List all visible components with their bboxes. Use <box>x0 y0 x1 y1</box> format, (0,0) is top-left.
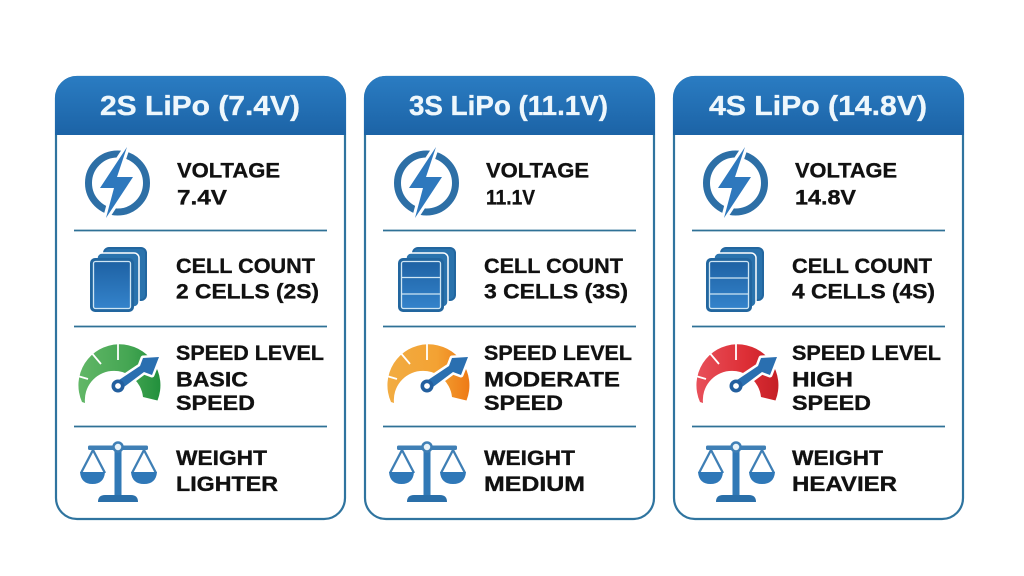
weight text: WEIGHT <box>792 447 883 470</box>
icon: speed gauge <box>385 341 469 403</box>
icon: balance scale <box>698 442 775 502</box>
voltage text: 11.1V <box>486 186 535 210</box>
speed level text: SPEED LEVEL <box>484 342 632 365</box>
weight text: HEAVIER <box>792 473 897 496</box>
weight text <box>176 447 278 496</box>
icon: cell stack <box>706 248 763 312</box>
icon: cell stack <box>398 248 455 312</box>
weight text <box>484 447 585 496</box>
speed level text: HIGH <box>792 368 853 392</box>
heading: 4S LiPo (14.8V) <box>709 90 927 121</box>
voltage text: 14.8V <box>795 186 856 210</box>
cell count text <box>792 255 935 304</box>
card outline <box>674 77 963 519</box>
icon: cell stack <box>90 248 146 312</box>
voltage text <box>177 160 280 210</box>
weight text: WEIGHT <box>176 447 267 470</box>
cell count text: CELL COUNT <box>792 255 932 278</box>
speed level text: BASIC <box>176 368 248 392</box>
header band <box>55 76 346 135</box>
header band <box>673 76 964 135</box>
icon: balance scale <box>389 442 466 502</box>
icon: voltage bolt <box>88 147 146 218</box>
icon: speed gauge <box>76 341 160 403</box>
heading: 2S LiPo (7.4V) <box>100 90 300 121</box>
voltage text <box>795 160 897 210</box>
heading: 3S LiPo (11.1V) <box>409 90 608 121</box>
panel: 4S LiPo <box>673 76 964 519</box>
speed level text <box>792 342 941 415</box>
icon: speed gauge <box>694 341 778 403</box>
voltage text <box>486 160 589 210</box>
icon: voltage bolt <box>398 147 456 218</box>
cell count text: 4 CELLS (4S) <box>792 280 935 304</box>
cell count text <box>484 255 628 304</box>
weight text: MEDIUM <box>484 473 585 496</box>
speed level text: SPEED <box>176 392 255 415</box>
panel: 2S LiPo <box>55 76 346 519</box>
cell count text: 2 CELLS (2S) <box>176 280 319 304</box>
weight text: WEIGHT <box>484 447 575 470</box>
panel: 3S LiPo <box>364 76 655 519</box>
speed level text: SPEED <box>484 392 563 415</box>
speed level text: MODERATE <box>484 368 620 392</box>
cell count text: CELL COUNT <box>484 255 623 278</box>
speed level text: SPEED LEVEL <box>792 342 941 365</box>
header band <box>364 76 655 135</box>
icon: balance scale <box>80 442 157 502</box>
icon: voltage bolt <box>706 147 764 218</box>
cell count text: 3 CELLS (3S) <box>484 280 628 304</box>
card outline <box>56 77 345 519</box>
speed level text: SPEED LEVEL <box>176 342 324 365</box>
speed level text <box>484 342 632 415</box>
card outline <box>365 77 654 519</box>
voltage text: 7.4V <box>177 186 227 210</box>
voltage text: VOLTAGE <box>177 160 280 182</box>
cell count text <box>176 255 319 304</box>
weight text: LIGHTER <box>176 473 278 496</box>
weight text <box>792 447 897 496</box>
speed level text: SPEED <box>792 392 871 415</box>
cell count text: CELL COUNT <box>176 255 315 278</box>
speed level text <box>176 342 324 415</box>
voltage text: VOLTAGE <box>486 160 589 182</box>
voltage text: VOLTAGE <box>795 160 897 182</box>
